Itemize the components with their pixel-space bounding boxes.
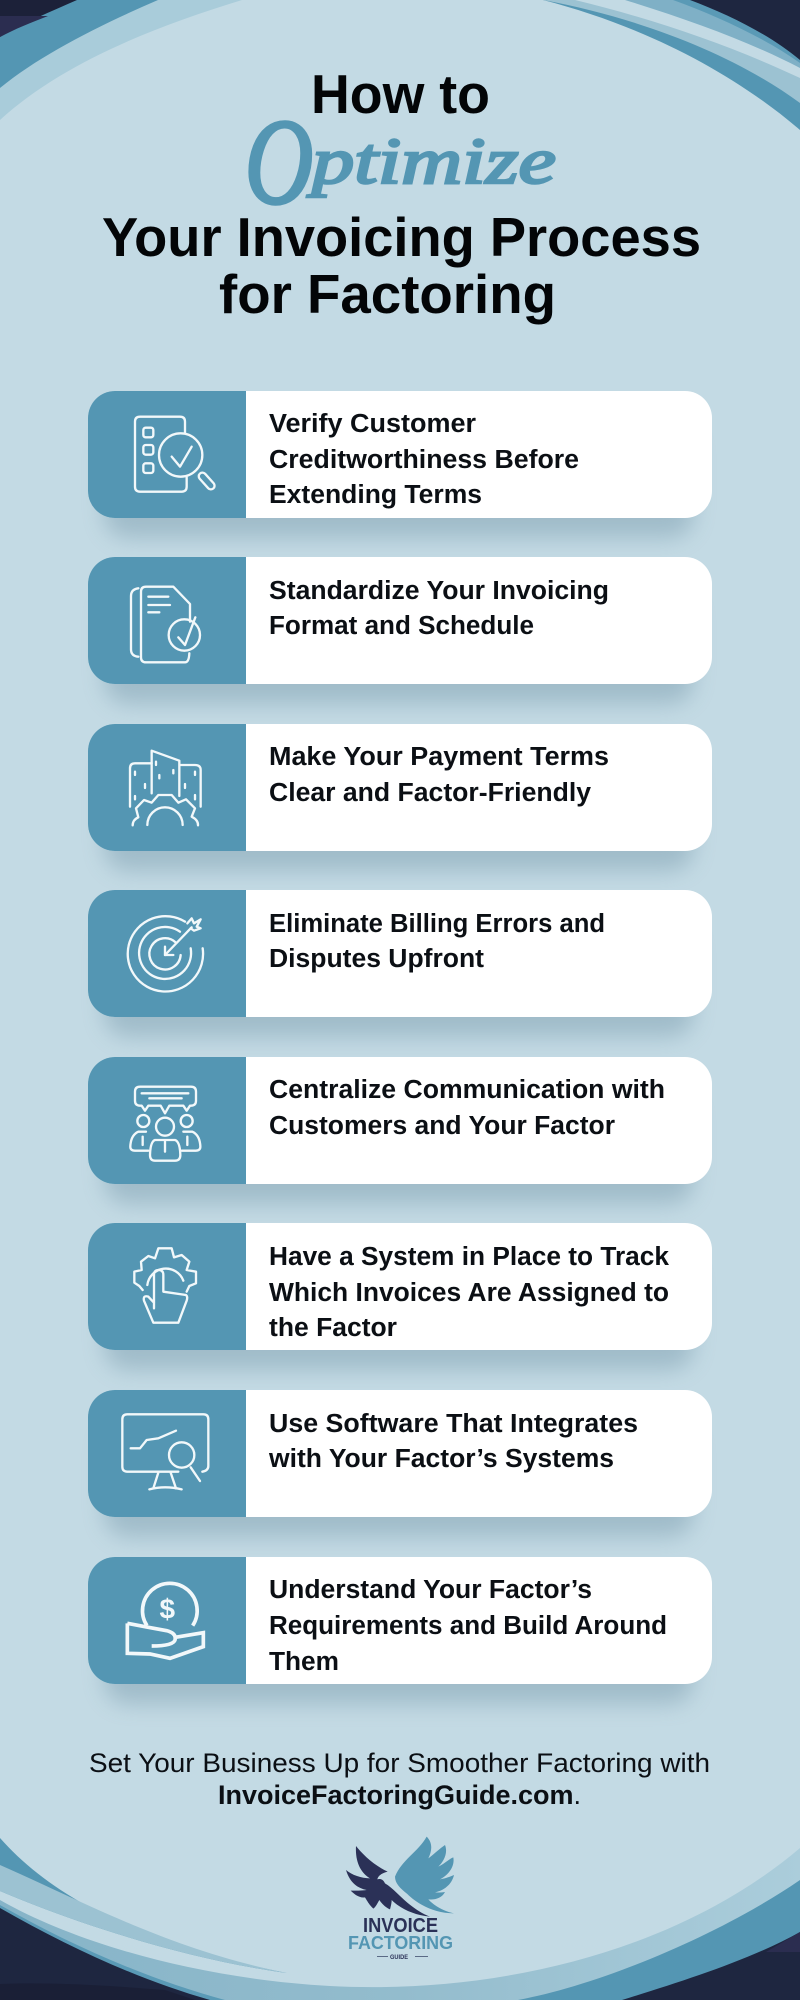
text: step 1: Creditworthiness Before	[269, 446, 579, 474]
text: step 8: Understand Your Factor’s	[269, 1576, 592, 1604]
closing text	[89, 1748, 710, 1810]
text: step 7: Use Software That Integrates	[269, 1410, 638, 1438]
top-left corner swoosh	[0, 0, 242, 120]
logo: Invoice Factoring Guide	[346, 1837, 454, 1961]
text: step 1: Verify Customer	[269, 410, 476, 438]
text: step 2: Standardize Your Invoicing	[269, 577, 609, 605]
icon: target with arrow	[128, 916, 203, 991]
text: step 5: Customers and Your Factor	[269, 1112, 615, 1140]
text: step 2: Format and Schedule	[269, 612, 534, 640]
text: step 5	[269, 1076, 665, 1140]
text: step 7	[268, 1410, 638, 1473]
icon: buildings and gear	[130, 751, 201, 825]
text: step 6: Which Invoices Are Assigned to	[269, 1279, 669, 1307]
panel: step 6	[88, 1223, 712, 1350]
text: step 2	[269, 577, 609, 640]
title: How to	[311, 63, 490, 125]
text: step 3	[269, 743, 609, 807]
text: step 6: the Factor	[269, 1314, 397, 1342]
text: step 4: Eliminate Billing Errors and	[269, 910, 605, 938]
text: step 6	[269, 1243, 670, 1342]
logo wordmark: FACTORING	[348, 1933, 453, 1953]
text: step 7: with Your Factor’s Systems	[268, 1445, 614, 1473]
icon: eagle wings	[346, 1837, 454, 1917]
title	[102, 63, 701, 325]
text: step 4	[269, 910, 605, 973]
text: step 5: Centralize Communication with	[269, 1076, 665, 1104]
title: Your Invoicing Process	[102, 206, 701, 268]
text: step 6: Have a System in Place to Track	[269, 1243, 670, 1271]
logo wordmark: GUIDE	[390, 1955, 408, 1961]
logo wordmark	[348, 1915, 453, 1961]
icon: checklist with magnifier	[135, 417, 216, 492]
text: step 1	[269, 410, 579, 509]
text: step 8	[269, 1576, 667, 1676]
card shadows	[104, 426, 694, 1704]
logo wordmark: INVOICE	[363, 1915, 438, 1937]
title script word: Optimize	[245, 95, 556, 230]
title script word: Optimize: O	[245, 95, 313, 230]
text: step 8: Them	[269, 1648, 339, 1676]
closing text: Set Your Business Up for Smoother Factoring with	[89, 1748, 710, 1778]
text: step 4: Disputes Upfront	[269, 945, 485, 973]
title: for Factoring	[219, 263, 556, 325]
text: step 8: Requirements and Build Around	[269, 1612, 667, 1640]
text: step 1: Extending Terms	[269, 481, 482, 509]
icon: team with speech bubble	[130, 1087, 200, 1161]
icon: hand pressing gear	[134, 1248, 196, 1323]
closing text: InvoiceFactoringGuide.com.	[218, 1780, 581, 1810]
panel: step 7	[88, 1390, 712, 1517]
panel: step 5	[88, 1057, 712, 1184]
panel: step 3	[88, 724, 712, 851]
text: step 3: Make Your Payment Terms	[269, 743, 609, 771]
panel: step 2	[88, 557, 712, 684]
top-right corner swoosh	[543, 0, 800, 130]
panel: step 8	[88, 1557, 712, 1684]
icon: hand holding dollar coin: $	[160, 1594, 176, 1625]
icon: hand holding dollar coin	[127, 1583, 203, 1658]
icon: monitor with chart and magnifier	[122, 1414, 208, 1489]
bottom corner swooshes	[0, 1838, 800, 2000]
panel: step 1	[88, 391, 712, 518]
icon: document with check	[131, 587, 200, 662]
panel: step 4	[88, 890, 712, 1017]
title script word: Optimize: ptimize	[307, 125, 556, 198]
text: step 3: Clear and Factor-Friendly	[269, 779, 592, 807]
